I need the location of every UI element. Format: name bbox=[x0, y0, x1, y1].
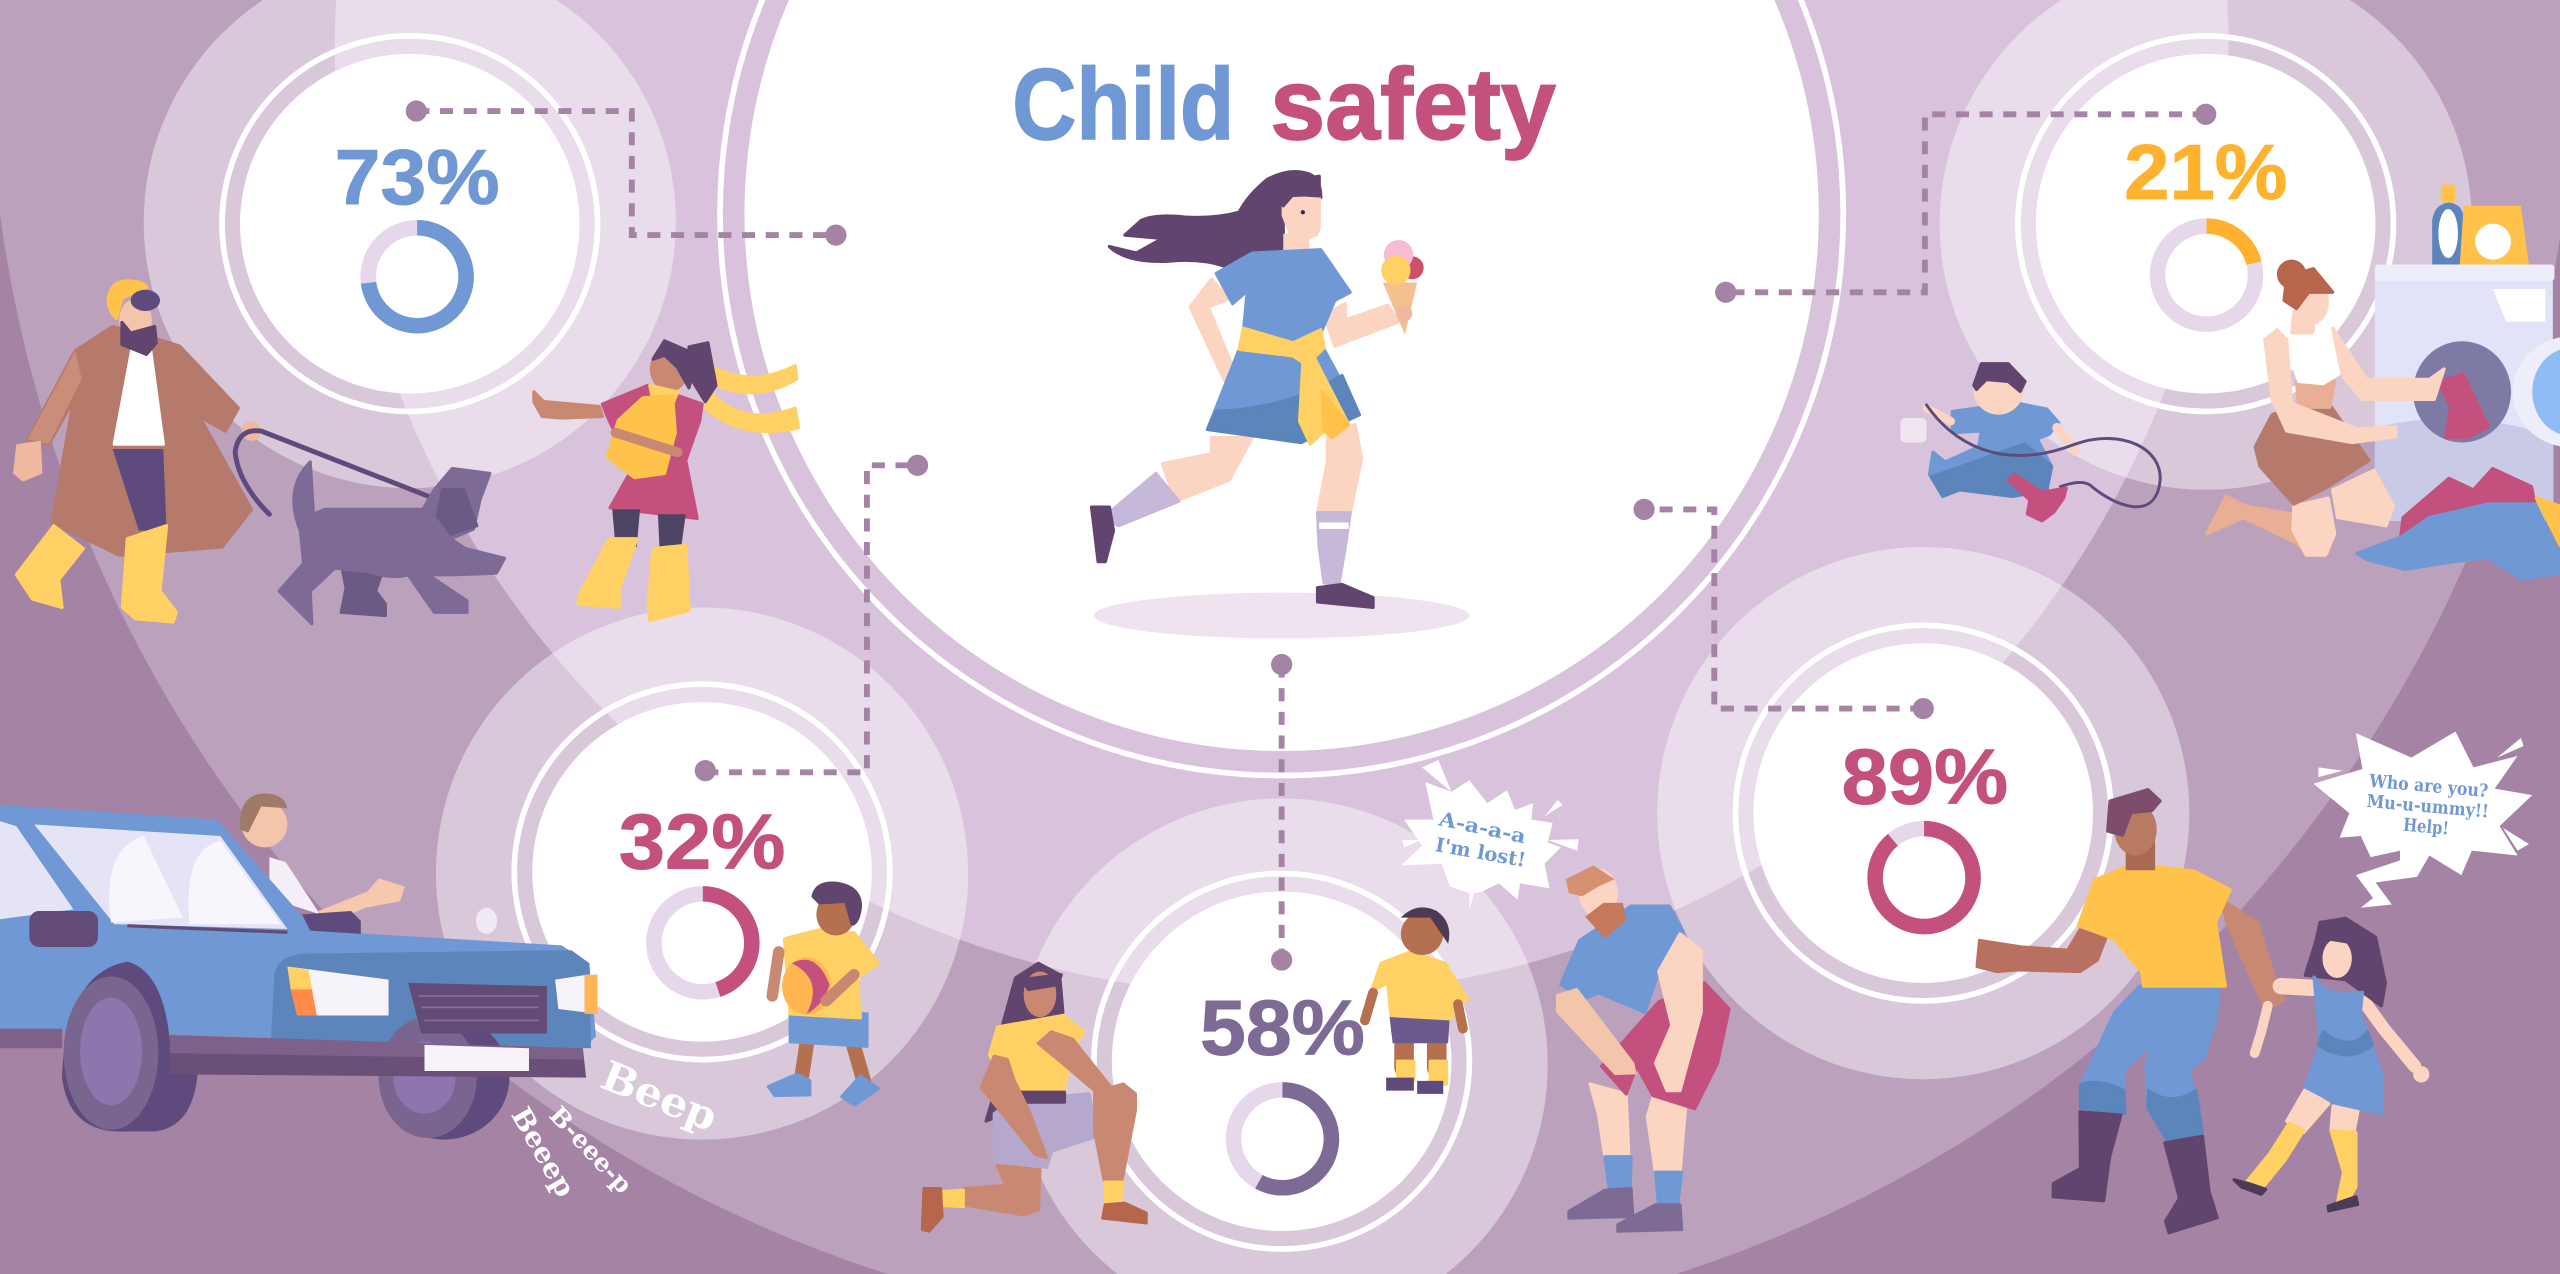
figure: kneeling woman bbox=[922, 963, 1146, 1231]
panel: 21 percent disc bbox=[1940, 0, 2472, 490]
text: Beeep: Beeep bbox=[504, 1101, 582, 1203]
stat: 73%: 73% bbox=[335, 133, 500, 221]
figure: scared girl with backpack bbox=[534, 341, 798, 620]
laundry pile bbox=[2357, 469, 2560, 579]
stat: 21% bbox=[2124, 128, 2287, 324]
figure: boy with ball bbox=[768, 883, 878, 1105]
speech bubble: Who are you: Help! bbox=[2402, 815, 2450, 840]
stat: 32%: 32% bbox=[619, 798, 785, 886]
stat: 89%: 89% bbox=[1842, 732, 2008, 820]
stat: 89% bbox=[1842, 732, 2008, 927]
figure: man in yellow shirt bbox=[1977, 790, 2285, 1233]
central white circle with ring bbox=[720, 0, 1843, 776]
speech bubble: I'm lost: A-a-a-a bbox=[1436, 807, 1528, 848]
panel: 73 percent disc bbox=[144, 0, 676, 488]
speech bubble: Who are you: Mu-u-ummy!! bbox=[2366, 791, 2490, 823]
panel: 32 percent disc bbox=[436, 607, 968, 1140]
figure: running girl with ice cream bbox=[1092, 172, 1469, 638]
figure: dog bbox=[279, 462, 504, 624]
text: Beep: Beep bbox=[594, 1051, 724, 1141]
panel: 58 percent disc bbox=[1016, 798, 1548, 1274]
stat: 32% bbox=[619, 798, 785, 992]
figure: baby with hair dryer and socket bbox=[1900, 364, 2160, 521]
stat: 58% bbox=[1200, 984, 1365, 1188]
title bbox=[1012, 48, 1556, 161]
panel: 89 percent disc bbox=[1657, 547, 2189, 1079]
speech bubble: I'm lost: I'm lost! bbox=[1433, 833, 1528, 872]
speech bubble: Who are you bbox=[2313, 731, 2532, 908]
speech bubble: I'm lost bbox=[1401, 760, 1579, 909]
speech bubble: Who are you: Who are you? bbox=[2367, 771, 2489, 802]
figure: crying boy bbox=[1365, 907, 1468, 1094]
connector lines with dots bbox=[406, 100, 2216, 971]
stat: 73% bbox=[335, 133, 500, 326]
stat: 58%: 58% bbox=[1200, 984, 1365, 1072]
stat: 21%: 21% bbox=[2124, 128, 2287, 216]
figure: man with dog on leash bbox=[13, 281, 433, 622]
figure: car with angry driver bbox=[0, 793, 598, 1140]
figure: bending bearded man bbox=[1556, 865, 1729, 1231]
figure: frightened girl in blue dress bbox=[2234, 918, 2429, 1211]
title: safety bbox=[1270, 48, 1556, 161]
title: Child bbox=[1012, 48, 1234, 161]
text: B-eee-p: B-eee-p bbox=[543, 1100, 638, 1199]
figure: woman doing laundry bbox=[2207, 260, 2444, 555]
figure: washing machine with detergent bbox=[2375, 184, 2560, 521]
